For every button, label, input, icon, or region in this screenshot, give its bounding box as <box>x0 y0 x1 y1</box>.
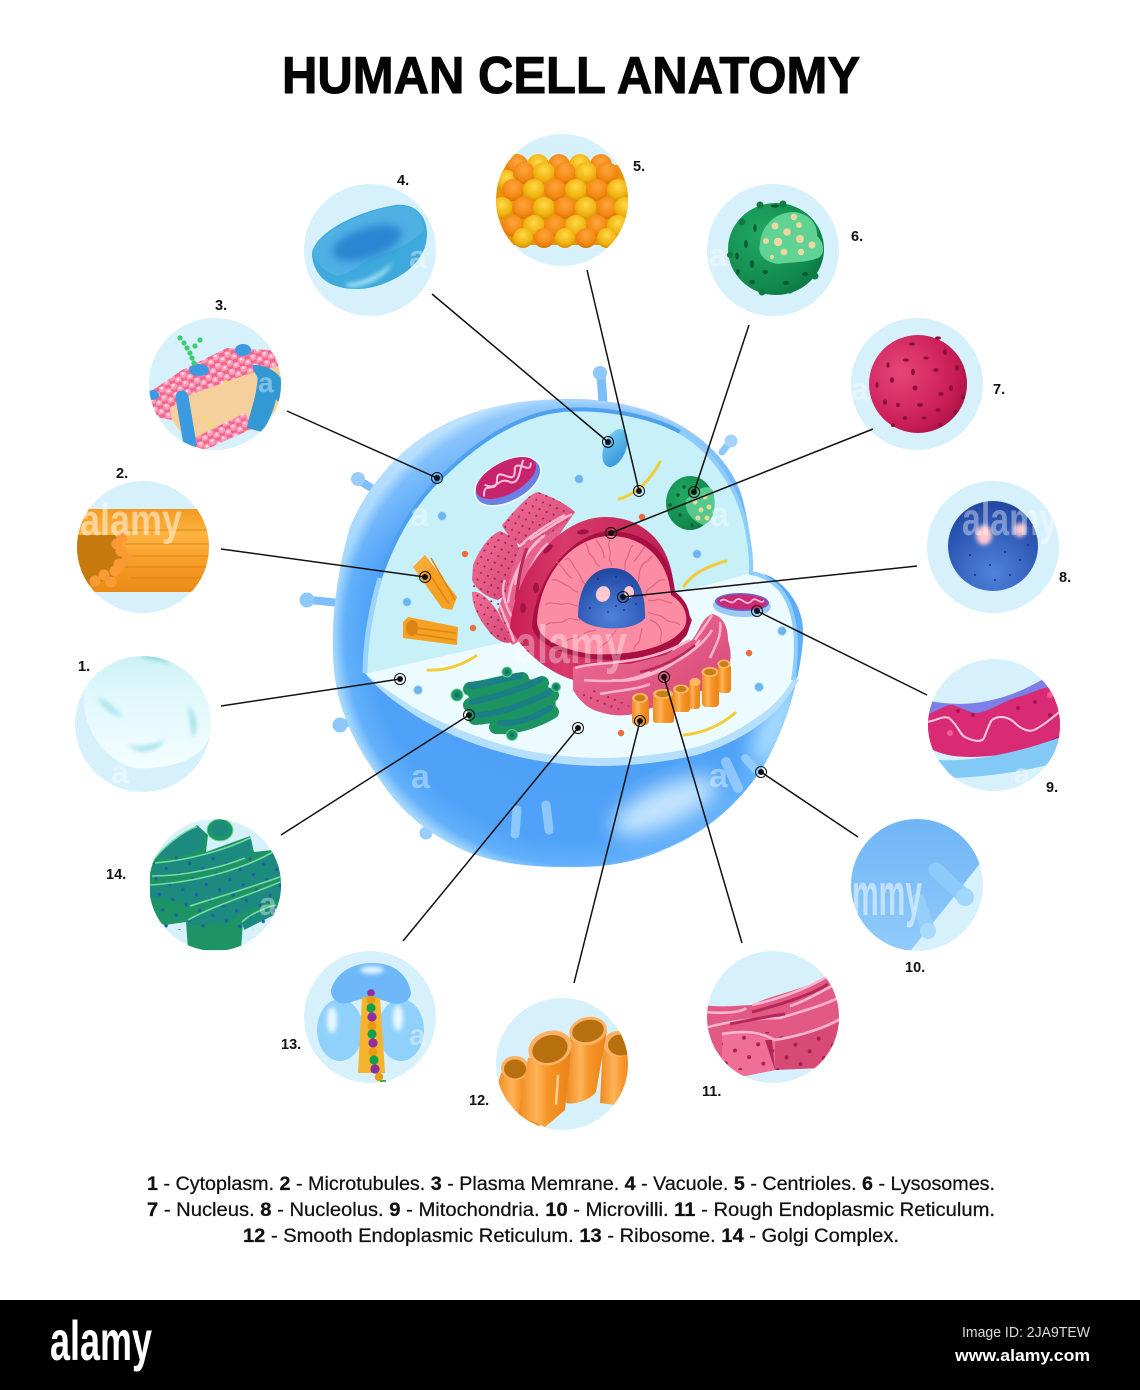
microtubule lower <box>403 617 458 645</box>
thumbnail 14: Golgi complex <box>149 819 285 951</box>
vacuole <box>597 425 633 471</box>
number labels <box>78 159 1071 1109</box>
microvilli on the cell surface <box>300 366 738 840</box>
watermark word: alamy <box>80 496 182 545</box>
Golgi complex <box>451 667 560 740</box>
thumbnail 10: microvilli <box>850 815 985 951</box>
watermark on cell: a <box>410 496 430 534</box>
thumbnail 1: cytoplasm <box>75 654 212 792</box>
watermark letter: a <box>409 239 427 275</box>
membrane rim stroke <box>380 409 680 578</box>
number labels: 1. <box>78 659 90 675</box>
leader lines <box>221 270 927 983</box>
cutaway floor <box>366 574 794 758</box>
legend: 7 - Nucleus. 8 - Nucleolus. 9 - Mitochondria. 10 - Microvilli. 11 - Rough Endoplasmic Reticulum. <box>147 1200 995 1221</box>
number labels: 2. <box>116 466 128 482</box>
mitochondrion lower <box>713 592 771 618</box>
image id: Image ID: 2JA9TEW <box>962 1324 1091 1341</box>
thumbnail 11: rough ER <box>700 951 845 1083</box>
nuclear pores <box>520 529 589 613</box>
number labels: 10. <box>905 960 925 976</box>
number labels: 14. <box>106 867 126 883</box>
cell body outer wall <box>333 399 803 867</box>
thumbnail 12: smooth ER <box>496 998 640 1130</box>
nucleus dark sphere <box>510 517 692 683</box>
watermark on cell: a <box>709 757 729 795</box>
centrioles <box>428 462 735 735</box>
title: HUMAN CELL ANATOMY <box>282 47 860 105</box>
number labels: 11. <box>702 1084 721 1100</box>
smooth ER tubes <box>632 660 731 725</box>
footer url: www.alamy.com <box>954 1346 1090 1365</box>
nucleolus <box>578 568 645 628</box>
thumbnail 4: vacuole <box>304 184 436 316</box>
legend: 12 - Smooth Endoplasmic Reticulum. 13 - Ribosome. 14 - Golgi Complex. <box>243 1226 899 1247</box>
microvilli front <box>515 758 758 834</box>
watermark on cell: alamy <box>515 615 627 675</box>
thumbnail 7: nucleus <box>851 318 983 450</box>
number labels: 7. <box>993 382 1005 398</box>
thumbnail 9: mitochondrion <box>925 659 1066 791</box>
leader end markers <box>394 436 766 778</box>
number labels: 4. <box>397 173 409 189</box>
legend <box>147 1174 995 1247</box>
rough ER behind nucleus <box>472 492 575 645</box>
footer bar <box>0 1300 1140 1390</box>
number labels: 13. <box>281 1037 301 1053</box>
watermark on cell: a <box>411 758 431 796</box>
nucleus membrane wrinkles <box>545 540 680 650</box>
watermark on cell: a <box>710 496 730 534</box>
watermark letter: a <box>258 367 274 398</box>
number labels: 5. <box>633 159 645 175</box>
rough ER lower <box>573 614 731 715</box>
cutaway back wall <box>365 409 796 758</box>
legend: 1 - Cytoplasm. 2 - Microtubules. 3 - Plasma Memrane. 4 - Vacuole. 5 - Centrioles. 6 - Lysosomes. <box>147 1174 995 1195</box>
small orange granules <box>462 514 752 736</box>
watermark on cell <box>410 496 730 796</box>
wall highlight <box>330 395 810 848</box>
watermark letter: a <box>409 1019 426 1052</box>
watermark letter: a <box>111 754 129 790</box>
watermark word: alamy <box>962 493 1058 545</box>
watermark word: mmy <box>852 861 922 928</box>
number labels: 8. <box>1059 570 1071 586</box>
nucleus inner face <box>532 531 690 660</box>
watermark letter: a <box>851 371 869 407</box>
watermark letter: a <box>1014 758 1030 789</box>
thumbnail 5: centrioles <box>491 134 636 266</box>
number labels: 3. <box>215 298 227 314</box>
thumbnail 8: nucleolus <box>927 481 1059 613</box>
mitochondrion upper <box>467 447 549 516</box>
number labels: 12. <box>469 1093 489 1109</box>
thumbnail 2: microtubule <box>77 481 211 613</box>
thumbnail 13: ribosome <box>304 951 436 1083</box>
watermark letter: a <box>259 886 277 922</box>
number labels: 9. <box>1046 780 1058 796</box>
watermark letter: a <box>709 237 727 273</box>
number labels: 6. <box>851 229 863 245</box>
small vesicles <box>402 474 786 694</box>
lysosome <box>666 476 715 530</box>
light lip of the cut <box>365 673 799 766</box>
microtubule upper <box>413 555 457 610</box>
cell diagram <box>300 366 820 867</box>
thumbnail 3: plasma membrane <box>147 318 282 452</box>
footer logo: alamy <box>50 1309 152 1372</box>
thumbnail 6: lysosome <box>707 184 839 316</box>
